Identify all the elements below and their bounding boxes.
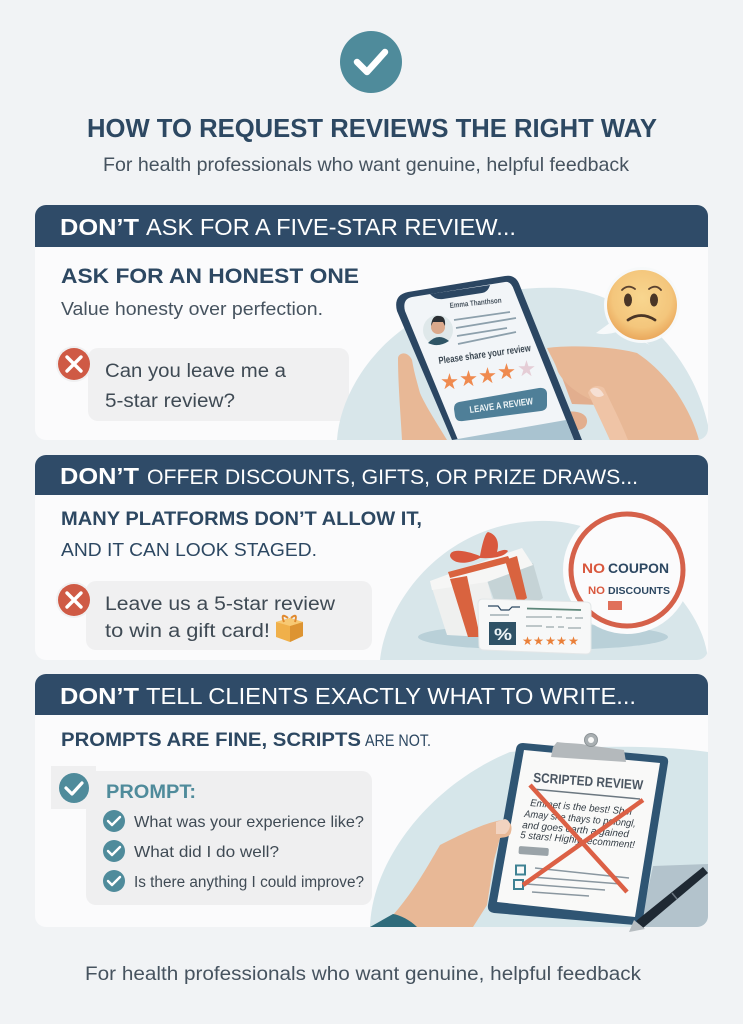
heading: many platforms: MANY PLATFORMS DON’T ALLOW IT, <box>61 509 422 530</box>
phone: LEAVE A REVIEW <box>469 396 534 416</box>
heading: ask for an honest one: ASK FOR AN HONEST ONE <box>61 265 359 288</box>
no coupon seal: DISCOUNTS <box>608 585 670 597</box>
prompt item 3 <box>103 870 364 892</box>
clipboard: Emmet is the best! Shel <box>530 798 633 818</box>
no coupon seal <box>563 506 691 634</box>
header bar: incentives <box>35 455 708 495</box>
phone: ★ <box>517 356 536 381</box>
phone <box>396 276 582 440</box>
hand <box>385 820 512 927</box>
header bar: five-star: ASK FOR A FIVE-STAR REVIEW... <box>146 214 516 240</box>
prompt item 1: What was your experience like? <box>134 814 364 831</box>
footer text: For health professionals who want genuine, helpful feedback <box>85 964 642 985</box>
coupon card: % <box>494 625 512 644</box>
clipboard: Amay she thays to pelongl, <box>523 809 636 830</box>
illustration: phone in hands <box>337 276 708 440</box>
right hand <box>547 346 699 440</box>
phone: ★ <box>497 359 516 384</box>
panel: incentives <box>35 455 708 660</box>
prompt item 3: Is there anything I could improve? <box>134 874 364 891</box>
icon: small gift <box>276 616 303 642</box>
coupon card: ★ <box>568 634 579 648</box>
prompt item 2 <box>103 840 279 862</box>
no coupon seal: COUPON <box>608 560 669 576</box>
icon: worried face with speech bubble <box>596 267 680 345</box>
header bar: five-star <box>35 205 708 247</box>
lower fingers behind phone <box>562 378 594 430</box>
header bar: scripts: TELL CLIENTS EXACTLY WHAT TO WRITE... <box>146 683 636 709</box>
header bar: incentives: OFFER DISCOUNTS, GIFTS, OR PRIZE DRAWS... <box>147 465 638 489</box>
speech bubble: gift card <box>86 581 372 650</box>
text: value honesty: Value honesty over perfection. <box>61 299 323 319</box>
left hand <box>398 353 447 440</box>
illustration: gift, coupon and no-coupon seal <box>380 506 708 660</box>
coupon card: ★ <box>556 634 567 648</box>
panel: five-star review <box>35 205 708 440</box>
phone: ★ <box>440 369 459 394</box>
heading: prompts are fine: PROMPTS ARE FINE, SCRIPTS <box>61 730 361 751</box>
header bar: incentives: DON’T <box>60 463 139 489</box>
clipboard <box>488 734 668 925</box>
label: prompt: PROMPT: <box>106 782 196 803</box>
clipboard: and goes earth a gained <box>522 820 630 840</box>
header bar: scripts: DON’T <box>60 683 139 709</box>
speech bubble: gift card: to win a gift card! <box>105 621 270 642</box>
coupon card: ★ <box>522 634 533 648</box>
phone: ★ <box>478 363 497 388</box>
prompt item 1 <box>103 810 364 832</box>
no coupon seal: NO <box>588 585 605 597</box>
header bar: five-star: DON’T <box>60 214 139 240</box>
clipboard: 5 stars! Highly recomment! <box>520 830 635 851</box>
header bar: scripts <box>35 674 708 715</box>
heading: looks staged: AND IT CAN LOOK STAGED. <box>61 539 317 560</box>
icon: prompt check <box>59 773 89 803</box>
speech bubble: gift card: Leave us a 5-star review <box>105 594 335 615</box>
gift box <box>430 532 543 638</box>
panel: scripts <box>35 674 708 927</box>
prompt bubble <box>51 766 372 905</box>
speech bubble: bad request <box>88 348 349 421</box>
heading: prompts are fine: ARE NOT. <box>365 731 431 750</box>
title: HOW TO REQUEST REVIEWS THE RIGHT WAY <box>87 113 657 143</box>
illustration: scripted review clipboard <box>370 734 708 927</box>
icon: red x <box>56 582 92 618</box>
speech bubble: bad request: 5-star review? <box>105 391 235 412</box>
icon: top check badge <box>340 31 402 93</box>
coupon card: ★ <box>533 634 544 648</box>
prompt item 2: What did I do well? <box>134 844 279 861</box>
icon: pen <box>629 867 708 932</box>
coupon card <box>478 599 591 654</box>
no coupon seal: NO <box>582 560 605 576</box>
coupon card: ★ <box>545 634 556 648</box>
phone: Please share your review <box>438 343 532 367</box>
icon: red x <box>56 346 92 382</box>
phone: Emma Thanthson <box>449 296 502 310</box>
subtitle: For health professionals who want genuine, helpful feedback <box>103 154 629 176</box>
phone: ★ <box>459 366 478 391</box>
heading: prompts are fine <box>62 732 430 749</box>
speech bubble: bad request: Can you leave me a <box>105 361 286 382</box>
clipboard: SCRIPTED REVIEW <box>533 770 644 793</box>
